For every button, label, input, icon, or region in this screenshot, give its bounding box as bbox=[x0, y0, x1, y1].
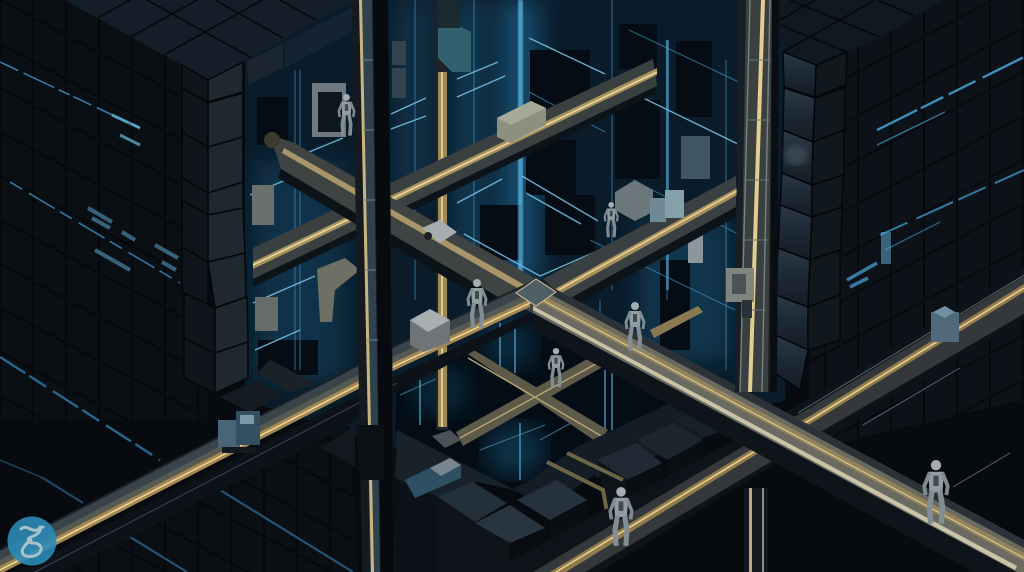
small vehicle bbox=[432, 430, 461, 448]
right block faces bbox=[808, 0, 1024, 450]
robot in door bbox=[339, 94, 354, 136]
cargo cart beam bbox=[650, 190, 684, 222]
lit window right bbox=[688, 235, 703, 263]
sky reflection bbox=[784, 145, 808, 165]
bottom left cube block bbox=[56, 425, 358, 572]
main right diagonal beam bbox=[533, 277, 1024, 572]
window left bottom bbox=[255, 297, 278, 331]
cube two bbox=[475, 505, 545, 572]
cube five bbox=[637, 423, 703, 490]
cargo cart left bbox=[218, 411, 260, 453]
corner lit faces bbox=[775, 52, 816, 390]
corner dark faces bbox=[808, 52, 847, 350]
well crossing beams bbox=[456, 349, 608, 446]
central lit shaft bbox=[245, 0, 785, 500]
blue frame lines bbox=[295, 0, 745, 375]
window lower left bbox=[252, 185, 274, 225]
corner cube right faces bbox=[208, 62, 248, 393]
blue data streaks left bbox=[0, 62, 180, 503]
vertical column left bbox=[352, 0, 395, 572]
curved brass rails bbox=[547, 453, 623, 512]
central bright column bbox=[518, 0, 523, 280]
cube three bbox=[517, 480, 587, 572]
floor cart bbox=[405, 458, 461, 498]
hoist unit bbox=[726, 268, 754, 318]
lower right long gold beam bbox=[500, 266, 1024, 572]
upper cube face bbox=[247, 43, 283, 85]
cube six bbox=[675, 412, 720, 437]
blue data streaks right bbox=[847, 57, 1024, 287]
upper right beam bbox=[543, 173, 764, 306]
robot on lower beam bbox=[610, 487, 632, 546]
floor base plate bbox=[395, 430, 515, 497]
robots and carts bbox=[218, 94, 959, 546]
robot in well bbox=[549, 348, 563, 387]
bright frame lines bbox=[250, 38, 740, 370]
left cube block bbox=[0, 0, 352, 503]
corner cube left faces bbox=[182, 65, 215, 393]
main left diagonal beam bbox=[0, 283, 530, 572]
robot far right bbox=[924, 460, 948, 524]
floor cube cluster bbox=[395, 403, 725, 572]
vertical column right bbox=[735, 0, 779, 572]
top surface bbox=[65, 0, 352, 80]
robot frame door bbox=[312, 83, 346, 137]
robot near junction bbox=[468, 279, 486, 328]
logo badge bbox=[8, 516, 56, 566]
small far beam bbox=[650, 306, 703, 338]
wall panels bbox=[392, 41, 406, 98]
back cube face bbox=[285, 8, 352, 68]
vehicle bbox=[422, 220, 457, 243]
cube four bbox=[597, 443, 662, 520]
ledge plates bbox=[220, 360, 315, 412]
dark openings bbox=[257, 24, 712, 375]
well under the central junction bbox=[395, 315, 690, 490]
robot behind cart bbox=[605, 202, 618, 237]
shaft glow bbox=[255, 0, 730, 380]
right block top bbox=[778, 0, 943, 65]
gold rear rod bbox=[436, 0, 471, 430]
storage crate left bbox=[317, 258, 360, 322]
base plate right bbox=[577, 403, 725, 478]
cube one bbox=[438, 482, 507, 572]
storage shelves bbox=[681, 136, 710, 179]
right cube block bbox=[775, 0, 1024, 450]
crate right bbox=[615, 180, 653, 221]
upper left crossing beam bbox=[264, 132, 533, 313]
cargo box on beam bbox=[497, 101, 546, 143]
back elevated beam bbox=[253, 59, 657, 287]
left face cells bbox=[0, 0, 208, 420]
cargo cart right bbox=[931, 306, 959, 342]
robot on right beam bbox=[626, 302, 644, 351]
block side body bbox=[395, 478, 438, 572]
right side column line bbox=[666, 40, 669, 290]
cargo cart center bbox=[410, 309, 450, 352]
center junction plate bbox=[516, 279, 556, 306]
